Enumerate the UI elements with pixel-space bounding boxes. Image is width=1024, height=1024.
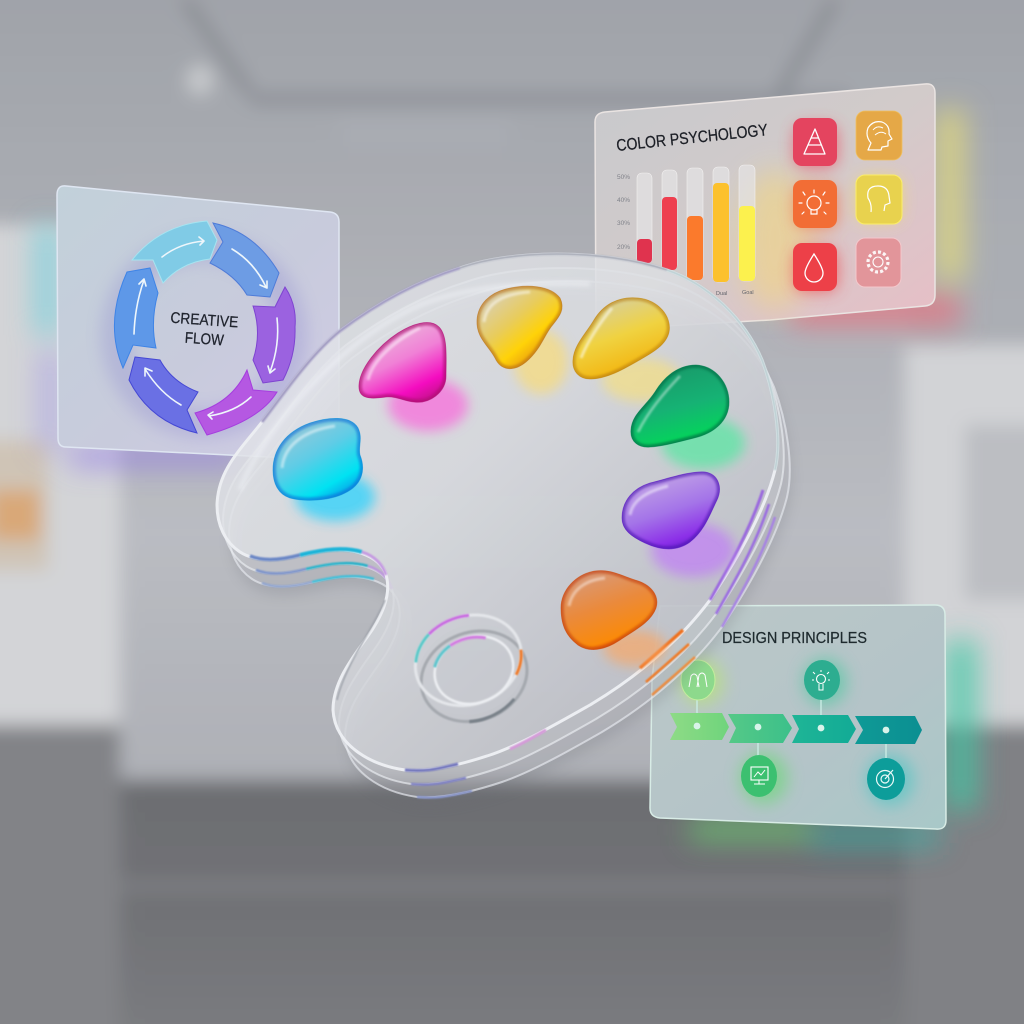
glow <box>514 330 568 394</box>
segment: purple <box>253 287 295 383</box>
icon: target <box>867 758 905 800</box>
icon: bulb <box>804 660 840 700</box>
blob <box>477 286 562 369</box>
bar tracks <box>637 165 755 282</box>
blob <box>561 571 657 650</box>
centre label <box>170 310 239 349</box>
inner rim <box>631 365 729 447</box>
axis labels: 20% <box>617 244 630 251</box>
step 4 <box>855 716 922 744</box>
connectors <box>697 698 886 758</box>
segment: cyan <box>132 221 217 283</box>
panel glass: creative flow <box>57 186 339 460</box>
icon: pyramid <box>793 118 837 166</box>
ring shadow <box>116 247 292 423</box>
palette top surface <box>217 254 778 770</box>
category labels: Dual <box>716 291 727 297</box>
blob <box>273 418 363 500</box>
icon: monitor <box>741 755 777 797</box>
palette middle layer <box>223 268 784 785</box>
icon: people <box>681 660 715 700</box>
thumb hole <box>402 600 540 736</box>
segment: magenta <box>195 370 277 435</box>
segment: left blue <box>114 268 158 368</box>
step 2 <box>728 714 792 743</box>
centre label: FLOW <box>184 330 225 349</box>
icon glows <box>795 125 900 291</box>
axis labels: 50% <box>617 174 630 181</box>
panel glow: creative flow <box>36 225 240 465</box>
glow <box>651 523 735 577</box>
glow <box>661 417 745 469</box>
cycle diagram <box>114 221 295 435</box>
palette shadow <box>231 290 792 806</box>
paint: magenta <box>359 323 468 431</box>
paint: cyan <box>273 418 375 521</box>
palette <box>217 254 792 806</box>
inner rim <box>622 472 720 549</box>
hole rings <box>402 600 540 736</box>
glow <box>388 379 468 431</box>
blob <box>631 365 729 447</box>
back layer iridescence <box>262 517 775 798</box>
glow <box>602 358 682 402</box>
shine <box>581 308 612 358</box>
segment: indigo <box>129 357 198 433</box>
paint: purple <box>622 472 735 577</box>
bar fills <box>637 239 652 263</box>
panel heading: COLOR PSYCHOLOGY <box>616 121 769 155</box>
nodes <box>694 723 889 733</box>
icon: light bulb <box>793 180 837 228</box>
shine <box>368 328 420 380</box>
paint: green <box>631 365 745 469</box>
blob <box>622 472 720 549</box>
hole glass fill <box>406 610 538 730</box>
hole iridescent arcs <box>406 601 539 734</box>
glow <box>603 630 667 666</box>
top rim iridescence <box>250 254 778 771</box>
glow <box>295 473 375 521</box>
inner rim <box>359 323 446 402</box>
icon: drop <box>793 243 837 291</box>
middle layer iridescence <box>256 504 769 785</box>
inner warm glow <box>739 170 811 310</box>
timeline <box>670 658 922 806</box>
segment: blue <box>210 223 279 297</box>
inner rim <box>273 418 363 500</box>
shine <box>484 292 530 322</box>
paint: orange <box>561 571 667 666</box>
icon: brain head <box>856 111 902 160</box>
flow arrows <box>134 237 278 419</box>
panel heading: DESIGN PRINCIPLES <box>722 630 867 647</box>
icon grid <box>793 111 902 291</box>
inner rim <box>477 286 562 369</box>
icon: gear <box>856 238 901 287</box>
panel: color psychology <box>595 84 965 330</box>
panel glow: design principles <box>690 640 977 846</box>
category labels: Goal <box>742 290 754 296</box>
blob <box>359 323 446 402</box>
step 1 <box>670 713 729 740</box>
axis labels: 30% <box>617 220 630 227</box>
shine <box>630 486 668 515</box>
panel glass: design principles <box>650 605 946 829</box>
panel glow: color psychology <box>790 110 965 325</box>
inner rim <box>573 298 669 379</box>
panel: design principles <box>650 605 977 846</box>
blob <box>573 298 669 379</box>
shine <box>569 578 605 606</box>
axis labels <box>617 174 630 251</box>
icon: head outline <box>856 175 902 224</box>
paint: yellow <box>477 286 568 394</box>
timeline glows <box>680 658 914 806</box>
bar chart <box>617 165 755 297</box>
palette back layer <box>229 281 790 798</box>
step 3 <box>792 715 856 743</box>
shine <box>638 376 680 432</box>
panel: creative flow <box>36 186 339 465</box>
axis labels: 40% <box>617 197 630 204</box>
paint: gold <box>573 298 682 402</box>
centre label: CREATIVE <box>170 310 239 331</box>
inner lip highlight <box>240 283 590 490</box>
shine <box>282 426 335 468</box>
panel glass: color psychology <box>595 84 935 330</box>
category labels <box>716 290 754 297</box>
inner rim <box>561 571 657 650</box>
